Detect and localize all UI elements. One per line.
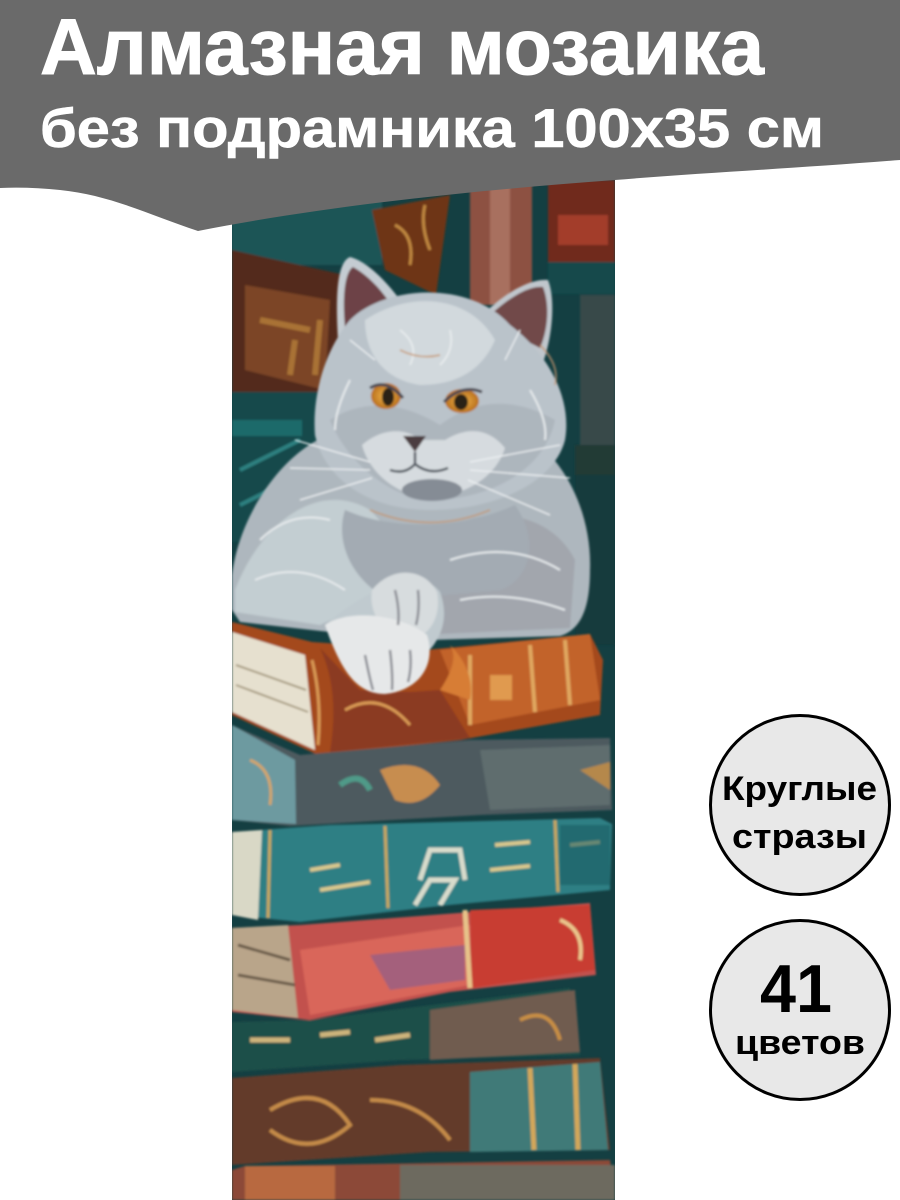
painting: cat on books [232, 175, 615, 1200]
book: red [232, 903, 596, 1020]
header banner [0, 0, 900, 231]
book: orange [232, 622, 603, 755]
cat chest [342, 506, 521, 589]
badge: round rhinestones: стразы [732, 818, 867, 856]
book stack [232, 622, 615, 1200]
cat body [232, 430, 590, 640]
cat nose [403, 436, 426, 452]
fur strokes [255, 330, 565, 610]
badge: round rhinestones: Круглые [722, 770, 877, 808]
badge: round rhinestones [710, 716, 890, 894]
book: brown [232, 1058, 610, 1165]
cat [232, 257, 590, 694]
painting background [232, 175, 615, 1200]
badge: 41 colours: цветов [735, 1024, 865, 1062]
title: Алмазная мозаика [40, 2, 765, 91]
badge: 41 colours: 41 [760, 951, 832, 1027]
cat ears [335, 256, 398, 338]
cat head [315, 292, 566, 510]
book: teal [232, 818, 612, 922]
book: dark green [232, 988, 580, 1072]
background books [232, 180, 615, 541]
subtitle: без подрамника 100х35 см [40, 97, 824, 159]
cat eyes [371, 383, 401, 409]
badge: 41 colours [710, 920, 890, 1100]
cat paws [332, 586, 445, 651]
book: bottom [232, 1160, 615, 1200]
book: grey teal [232, 725, 612, 826]
whiskers [290, 330, 570, 515]
